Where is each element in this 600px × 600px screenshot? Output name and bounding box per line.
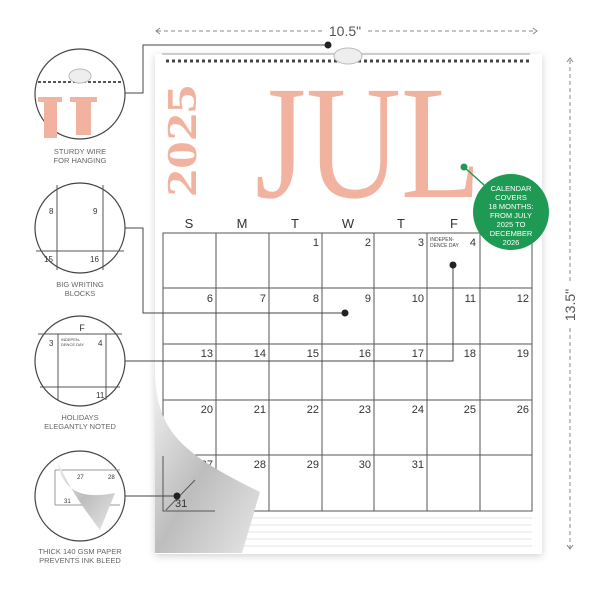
weekday headers: W <box>342 216 355 231</box>
callout: 18 months: FROM JULY <box>490 211 532 220</box>
panel: big writing blocks <box>35 183 125 298</box>
panel: thick paper: PREVENTS INK BLEED <box>39 556 121 565</box>
wire binding <box>162 48 530 64</box>
dates: 11 <box>465 293 476 305</box>
panel: holidays: 11 <box>96 391 105 400</box>
dates: 2 <box>365 237 371 249</box>
dates: 14 <box>254 348 266 360</box>
dates: 7 <box>260 293 266 305</box>
panel: big writing blocks: 16 <box>90 255 99 264</box>
panel: holidays: 3 <box>49 339 54 348</box>
dates: 10 <box>412 293 424 305</box>
height dimension <box>562 58 578 549</box>
panel: holidays <box>35 316 125 431</box>
weekday headers: F <box>450 216 458 231</box>
weekday headers: S <box>185 216 194 231</box>
panel: thick paper: 28 <box>108 475 115 481</box>
panel: big writing blocks: 8 <box>49 207 54 216</box>
panel: sturdy wire: STURDY WIRE <box>54 147 106 156</box>
dates: 17 <box>412 348 424 360</box>
panel: thick paper: THICK 140 GSM PAPER <box>38 547 122 556</box>
calendar sheet <box>155 48 542 554</box>
panel: holidays: ELEGANTLY NOTED <box>44 422 116 431</box>
panel: holidays: INDEPEN- <box>61 337 81 342</box>
weekday headers: T <box>397 216 405 231</box>
dates: 27 <box>201 459 213 471</box>
dates: 25 <box>464 404 476 416</box>
dates: 18 <box>464 348 476 360</box>
connectors <box>125 45 453 496</box>
dates: 1 <box>313 237 319 249</box>
panel: sturdy wire: FOR HANGING <box>54 156 107 165</box>
panel: big writing blocks: 9 <box>93 207 98 216</box>
callout: 18 months: DECEMBER <box>490 229 533 238</box>
panel: thick paper: 27 <box>77 475 84 481</box>
panel: holidays: F <box>79 323 85 333</box>
panel: big writing blocks: BIG WRITING <box>56 280 104 289</box>
dates: 8 <box>313 293 319 305</box>
dates: 31 <box>412 459 424 471</box>
dates: 22 <box>307 404 319 416</box>
width dimension: 10.5" <box>329 23 361 39</box>
dates: 21 <box>254 404 266 416</box>
panel: holidays: HOLIDAYS <box>61 413 99 422</box>
dates: 28 <box>254 459 266 471</box>
callout: 18 months: COVERS <box>495 193 527 202</box>
panel: holidays: 4 <box>98 339 103 348</box>
callout: 18 months: 2025 TO <box>497 220 526 229</box>
calendar sheet: 31 <box>175 498 187 510</box>
dates: 30 <box>359 459 371 471</box>
dates: 29 <box>307 459 319 471</box>
panel: big writing blocks: 15 <box>44 255 53 264</box>
calendar sheet: DENCE DAY <box>430 243 459 249</box>
dates: 3 <box>418 237 424 249</box>
panel: thick paper: 31 <box>64 499 71 505</box>
weekday headers: S <box>502 216 511 231</box>
page curl <box>155 375 260 553</box>
callout: 18 months: 2026 <box>503 238 519 247</box>
dates: 4 <box>470 237 476 249</box>
calendar grid <box>163 233 532 511</box>
dates: 24 <box>412 404 424 416</box>
dates: 13 <box>201 348 213 360</box>
width dimension <box>156 23 537 39</box>
height dimension: 13.5" <box>562 289 578 321</box>
dates: 15 <box>307 348 319 360</box>
callout: 18 months <box>460 164 549 250</box>
dates <box>201 237 529 471</box>
dates: 26 <box>517 404 529 416</box>
weekday headers: T <box>291 216 299 231</box>
dates: 12 <box>517 293 529 305</box>
notes lines <box>163 518 532 546</box>
year vertical: 2025 <box>160 85 206 197</box>
callout: 18 months: 18 MONTHS: <box>488 202 534 211</box>
panel: holidays: DENCE DAY <box>61 342 84 347</box>
dates: 23 <box>359 404 371 416</box>
dates: 16 <box>359 348 371 360</box>
weekday headers: M <box>237 216 247 231</box>
dates: 9 <box>365 293 371 305</box>
panel: sturdy wire <box>35 49 125 165</box>
callout: 18 months: CALENDAR <box>491 184 532 193</box>
dates: 19 <box>517 348 529 360</box>
dates: 20 <box>201 404 213 416</box>
dates: 6 <box>207 293 213 305</box>
weekday headers <box>185 216 511 231</box>
holiday note: INDEPEN- <box>430 237 454 243</box>
panel: thick paper <box>35 451 125 565</box>
month title: JUL <box>255 54 481 233</box>
panel: big writing blocks: BLOCKS <box>65 289 95 298</box>
